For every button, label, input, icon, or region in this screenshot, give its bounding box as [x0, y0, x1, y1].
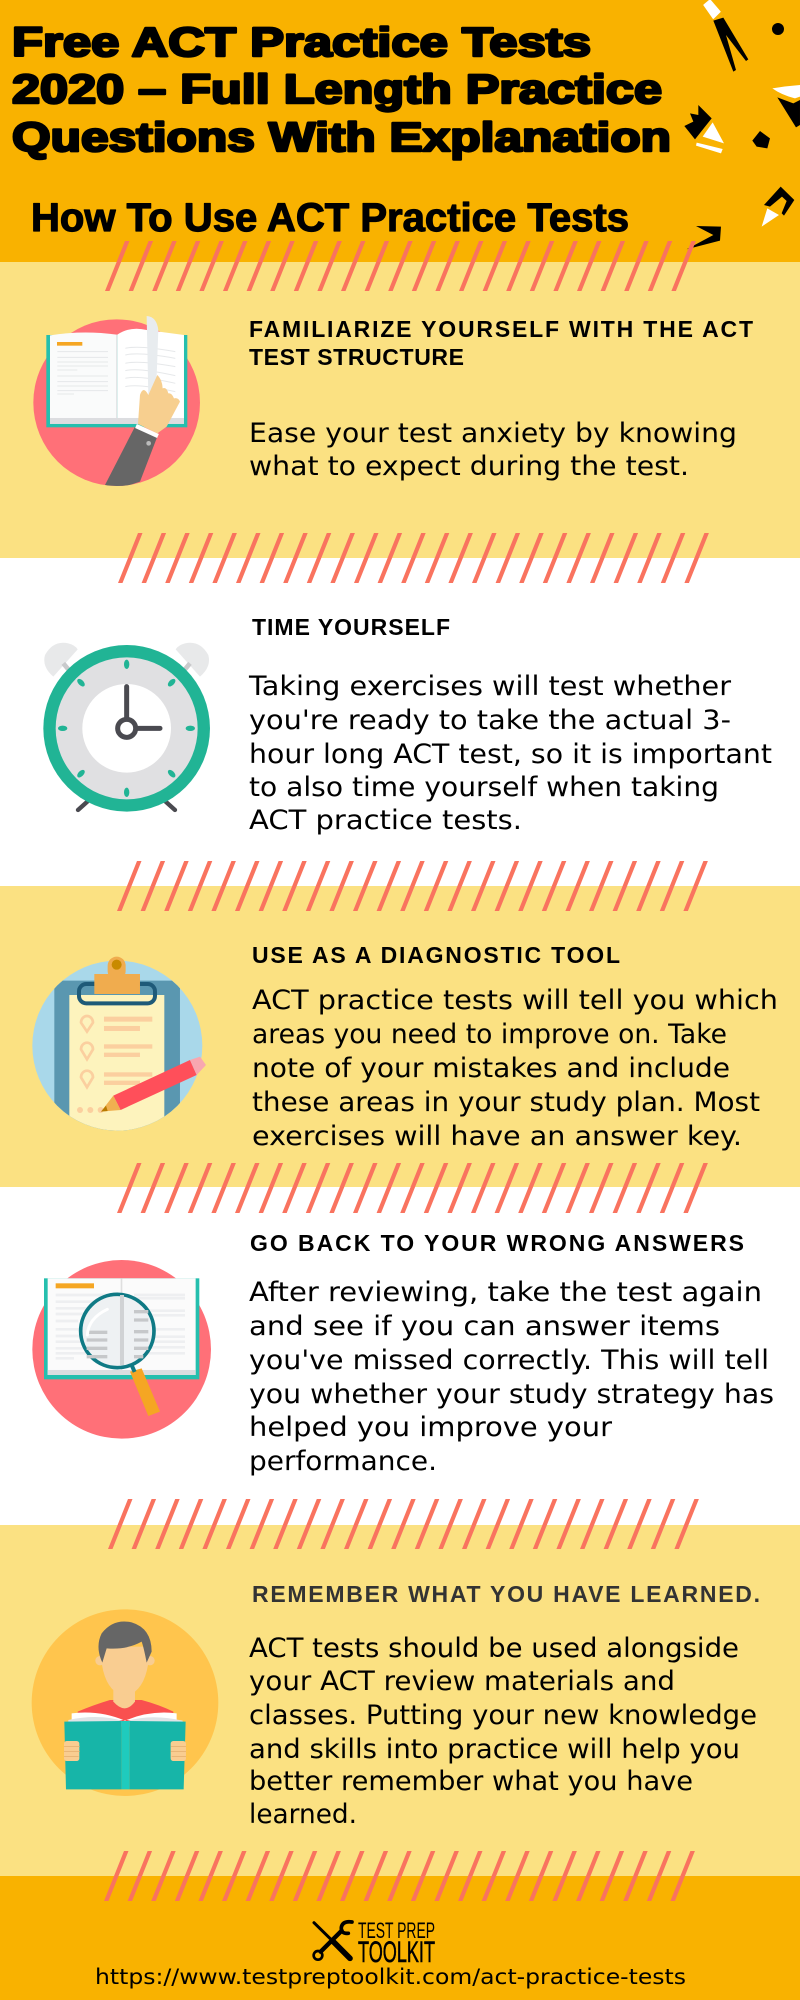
- text block: [249, 418, 737, 482]
- text block: [249, 1633, 757, 1830]
- heading: GO BACK TO YOUR WRONG ANSWERS: [250, 1230, 744, 1256]
- icon: book with magnifying glass: [32, 1260, 211, 1439]
- text block: your ACT review materials and: [249, 1666, 675, 1697]
- text block: [249, 1277, 774, 1477]
- text block: areas you need to improve on. Take: [252, 1019, 727, 1050]
- text block: exercises will have an answer key.: [252, 1121, 742, 1152]
- footer panel: [0, 1876, 800, 2000]
- text block: ACT practice tests.: [249, 805, 522, 836]
- icon: open book with hand: [33, 316, 200, 488]
- text block: you whether your study strategy has: [249, 1379, 774, 1410]
- title: Questions With Explanation: [12, 114, 671, 160]
- logo wordmark: TOOLKIT: [358, 1936, 435, 1969]
- logo wordmark: [358, 1918, 435, 1969]
- panel: wrong answers: [0, 1187, 800, 1525]
- icon: alarm clock: [43, 643, 210, 812]
- icon: scattered stationery decorations: [684, 0, 800, 249]
- panel: remember: [0, 1525, 800, 1876]
- title: Free ACT Practice Tests: [12, 19, 591, 65]
- text block: Taking exercises will test whether: [248, 671, 732, 702]
- heading: [249, 316, 753, 370]
- panel: diagnostic tool: [0, 886, 800, 1187]
- heading: FAMILIARIZE YOURSELF WITH THE ACT: [249, 316, 753, 342]
- title: 2020 – Full Length Practice: [12, 66, 662, 112]
- text block: performance.: [249, 1446, 437, 1477]
- panel: familiarize yourself: [0, 262, 800, 558]
- source url: https://www.testpreptoolkit.com/act-practice-tests: [95, 1965, 686, 1989]
- logo: [314, 1918, 435, 1969]
- text block: and see if you can answer items: [249, 1311, 720, 1342]
- text block: to also time yourself when taking: [249, 772, 719, 803]
- text block: you're ready to take the actual 3-: [249, 705, 731, 736]
- heading: TIME YOURSELF: [252, 614, 450, 640]
- icon: person reading book: [32, 1609, 218, 1796]
- text block: classes. Putting your new knowledge: [249, 1700, 757, 1731]
- text block: better remember what you have: [249, 1766, 693, 1797]
- text block: learned.: [249, 1799, 357, 1830]
- text block: hour long ACT test, so it is important: [249, 739, 772, 770]
- text block: ACT tests should be used alongside: [249, 1633, 739, 1664]
- heading: REMEMBER WHAT YOU HAVE LEARNED.: [252, 1581, 760, 1607]
- text block: what to expect during the test.: [249, 451, 689, 482]
- icon: clipboard and pencil: [32, 957, 206, 1147]
- logo wordmark: TEST PREP: [358, 1918, 435, 1943]
- text block: Ease your test anxiety by knowing: [249, 418, 737, 449]
- panel: time yourself: [0, 558, 800, 886]
- stripe dividers: [104, 241, 709, 1901]
- text block: [252, 985, 778, 1152]
- heading: TEST STRUCTURE: [249, 344, 464, 370]
- text block: these areas in your study plan. Most: [252, 1087, 760, 1118]
- text block: [248, 671, 772, 836]
- text block: After reviewing, take the test again: [249, 1277, 762, 1308]
- text block: and skills into practice will help you: [249, 1734, 740, 1765]
- header panel: [0, 0, 800, 262]
- subtitle: How To Use ACT Practice Tests: [31, 196, 629, 240]
- text block: you've missed correctly. This will tell: [249, 1345, 769, 1376]
- text block: ACT practice tests will tell you which: [252, 985, 778, 1016]
- text block: helped you improve your: [249, 1412, 613, 1443]
- icon: crossed screwdriver and wrench: [314, 1922, 352, 1960]
- heading: USE AS A DIAGNOSTIC TOOL: [252, 942, 620, 968]
- text block: note of your mistakes and include: [252, 1053, 730, 1084]
- title: [12, 19, 671, 160]
